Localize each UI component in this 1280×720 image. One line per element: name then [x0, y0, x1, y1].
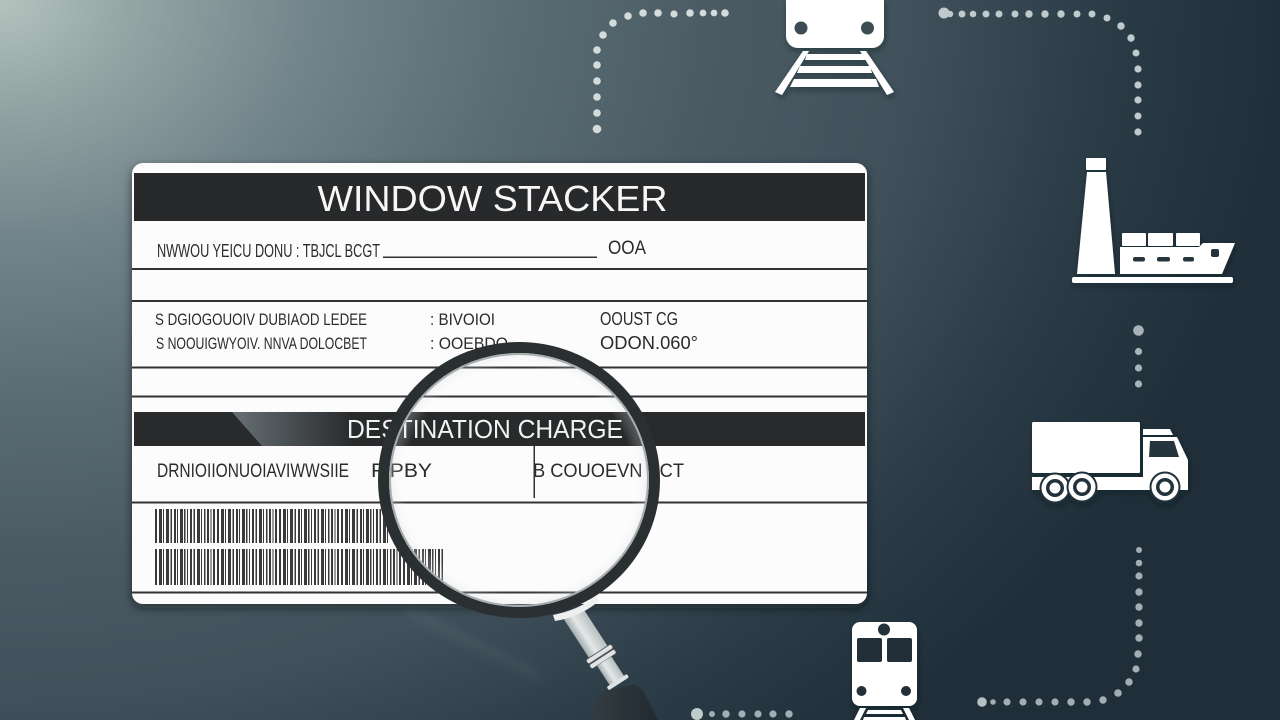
- icon: delivery truck: [1032, 422, 1188, 504]
- icon: ship with chimney: [1072, 158, 1235, 283]
- row: detail two: [156, 333, 698, 353]
- panel: shipping label card: [132, 163, 867, 604]
- row: detail two: S NOOUIGWYOIV. NNVA DOLOCBET: [156, 334, 367, 353]
- row: top reference: [157, 238, 646, 261]
- destination charge band: DESTINATION CHARGE: [347, 414, 623, 444]
- row: destination details: [157, 446, 684, 498]
- lens handle: [561, 605, 632, 692]
- row: destination details: B COUOEVN ECT: [533, 461, 684, 482]
- row: destination details: DRNIOIIONUOIAVIWWSIIE: [157, 461, 349, 482]
- icon: train front (bottom): [852, 622, 917, 720]
- icon: train on tracks (top): [775, 0, 894, 95]
- destination charge band: [134, 412, 865, 446]
- row: top reference: OOA: [608, 238, 646, 259]
- row: detail one: [155, 309, 678, 329]
- card base: [132, 163, 867, 604]
- lens glass: [389, 353, 649, 607]
- heading band: window stacker: [134, 173, 865, 221]
- light streak below card: [407, 610, 540, 677]
- dotted route: ship to truck: [1133, 325, 1144, 388]
- lens collar: [553, 596, 599, 621]
- row: detail one: S DGIOGOUOIV DUBIAOD LEDEE: [155, 310, 367, 329]
- magnifying glass: [384, 348, 658, 720]
- dotted route: bottom left: [691, 708, 793, 720]
- row: detail two: ODON.060°: [600, 333, 698, 353]
- lens inner rim: [390, 354, 648, 606]
- barcode: [155, 509, 445, 585]
- lens ring: [384, 348, 654, 612]
- row: detail one: OOUST CG: [600, 309, 678, 329]
- dotted route: top right: [938, 8, 1142, 136]
- divider rules: [132, 268, 867, 594]
- dotted route: bottom right: [977, 547, 1143, 707]
- heading band: window stacker: WINDOW STACKER: [318, 178, 668, 219]
- row: detail one: : BIVOIOI: [430, 310, 495, 329]
- lens handle grip: [593, 685, 658, 720]
- row: top reference: NWWOU YEICU DONU : TBJCL BCGT: [157, 241, 380, 261]
- row: destination details: F PBY: [371, 461, 432, 482]
- dotted route: top left: [593, 9, 729, 133]
- row: detail two: : OOEBDO: [430, 334, 508, 353]
